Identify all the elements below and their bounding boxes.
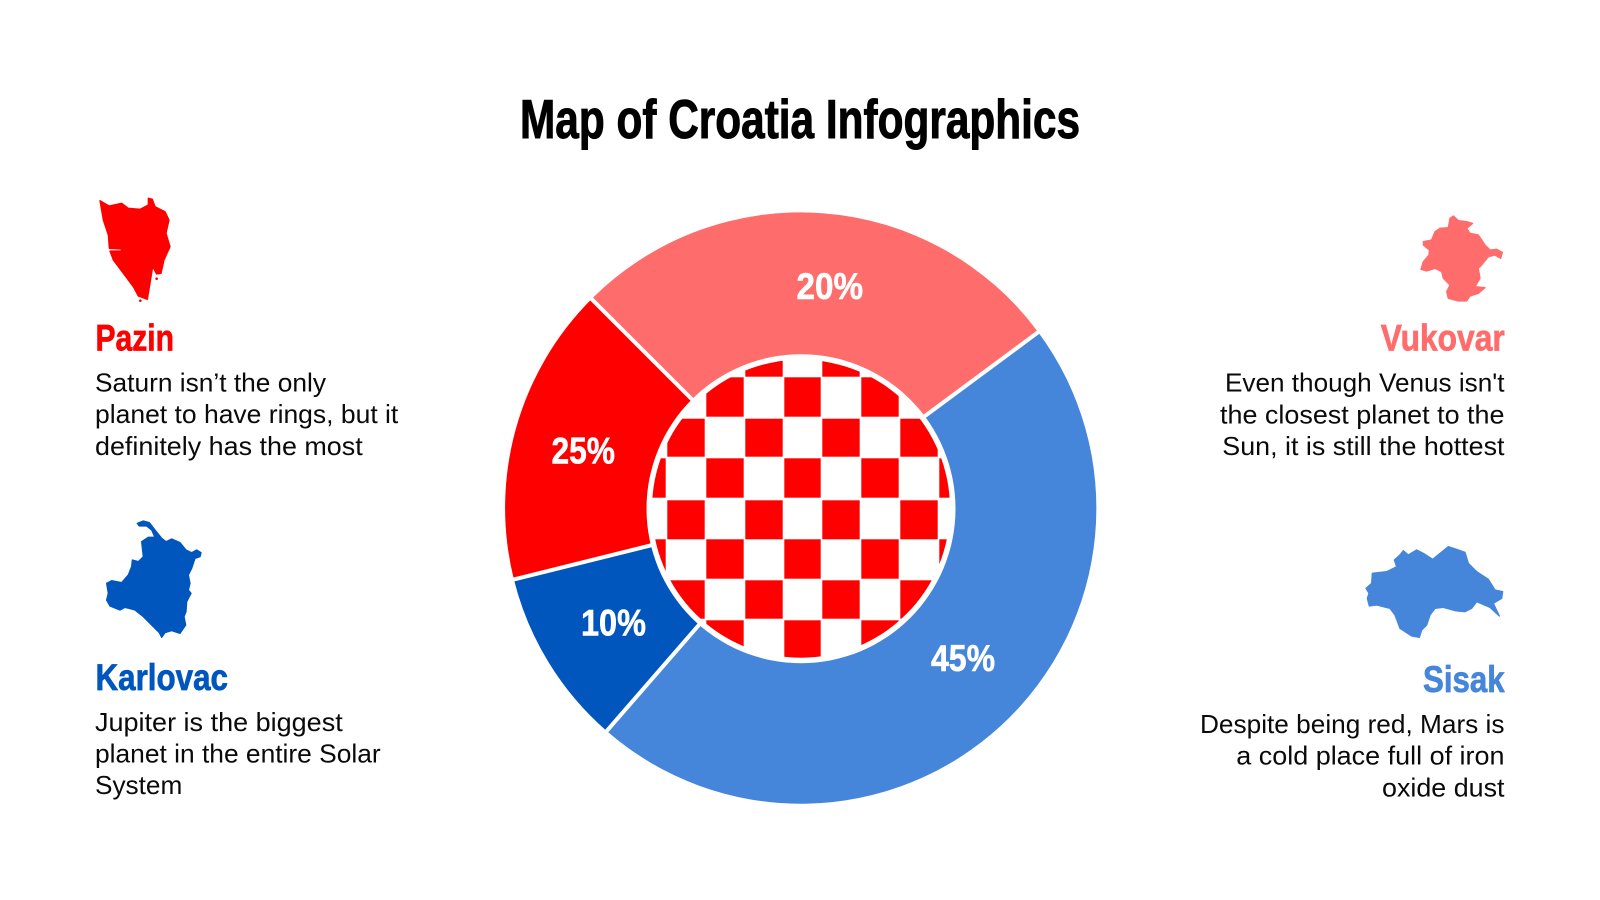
text: Pazin description: definitely has the most — [95, 431, 363, 461]
text: Karlovac description — [95, 707, 381, 800]
label: 45%: 45% — [931, 638, 995, 679]
text: Vukovar description: Sun, it is still the hottest — [1222, 431, 1505, 461]
icon: Karlovac map — [107, 521, 201, 637]
segment: 20% — [592, 212, 1038, 508]
text: Pazin description — [95, 368, 399, 461]
text: Sisak description — [1200, 709, 1505, 802]
icon: Vukovar map — [1421, 216, 1502, 301]
icon: Sisak map — [1366, 547, 1503, 637]
heading: Pazin: Pazin — [96, 318, 174, 359]
text: Sisak description: oxide dust — [1382, 772, 1505, 802]
segment: 25% — [505, 299, 801, 580]
panel: Sisak — [1200, 547, 1505, 802]
segment: 10% — [514, 508, 801, 731]
text: Pazin description: planet to have rings, but it — [95, 399, 399, 429]
label: 20%: 20% — [796, 266, 863, 307]
text: Vukovar description: the closest planet to the — [1220, 399, 1504, 429]
segment: 45% — [607, 332, 1096, 804]
label: 10%: 10% — [581, 602, 646, 644]
panel: Karlovac — [95, 521, 381, 800]
title: Map of Croatia Infographics — [520, 88, 1080, 150]
text: Sisak description: Despite being red, Mars is — [1200, 709, 1504, 739]
heading: Karlovac: Karlovac — [96, 657, 228, 698]
heading: Vukovar: Vukovar — [1381, 318, 1505, 359]
text: Vukovar description — [1220, 368, 1505, 461]
heading: Sisak: Sisak — [1423, 659, 1505, 700]
donut chart — [505, 212, 1096, 804]
flag: Croatian checkerboard — [640, 354, 959, 663]
panel: Vukovar — [1220, 216, 1505, 461]
text: Pazin description: Saturn isn’t the only — [95, 368, 326, 398]
panel: Pazin — [95, 198, 399, 461]
text: Sisak description: a cold place full of iron — [1236, 741, 1504, 771]
label: 25%: 25% — [552, 430, 615, 472]
icon: Pazin map — [100, 198, 170, 301]
text: Karlovac description: System — [95, 770, 182, 800]
text: Karlovac description: planet in the entire Solar — [95, 739, 381, 769]
text: Karlovac description: Jupiter is the biggest — [95, 707, 344, 737]
text: Vukovar description: Even though Venus isn't — [1225, 368, 1505, 398]
